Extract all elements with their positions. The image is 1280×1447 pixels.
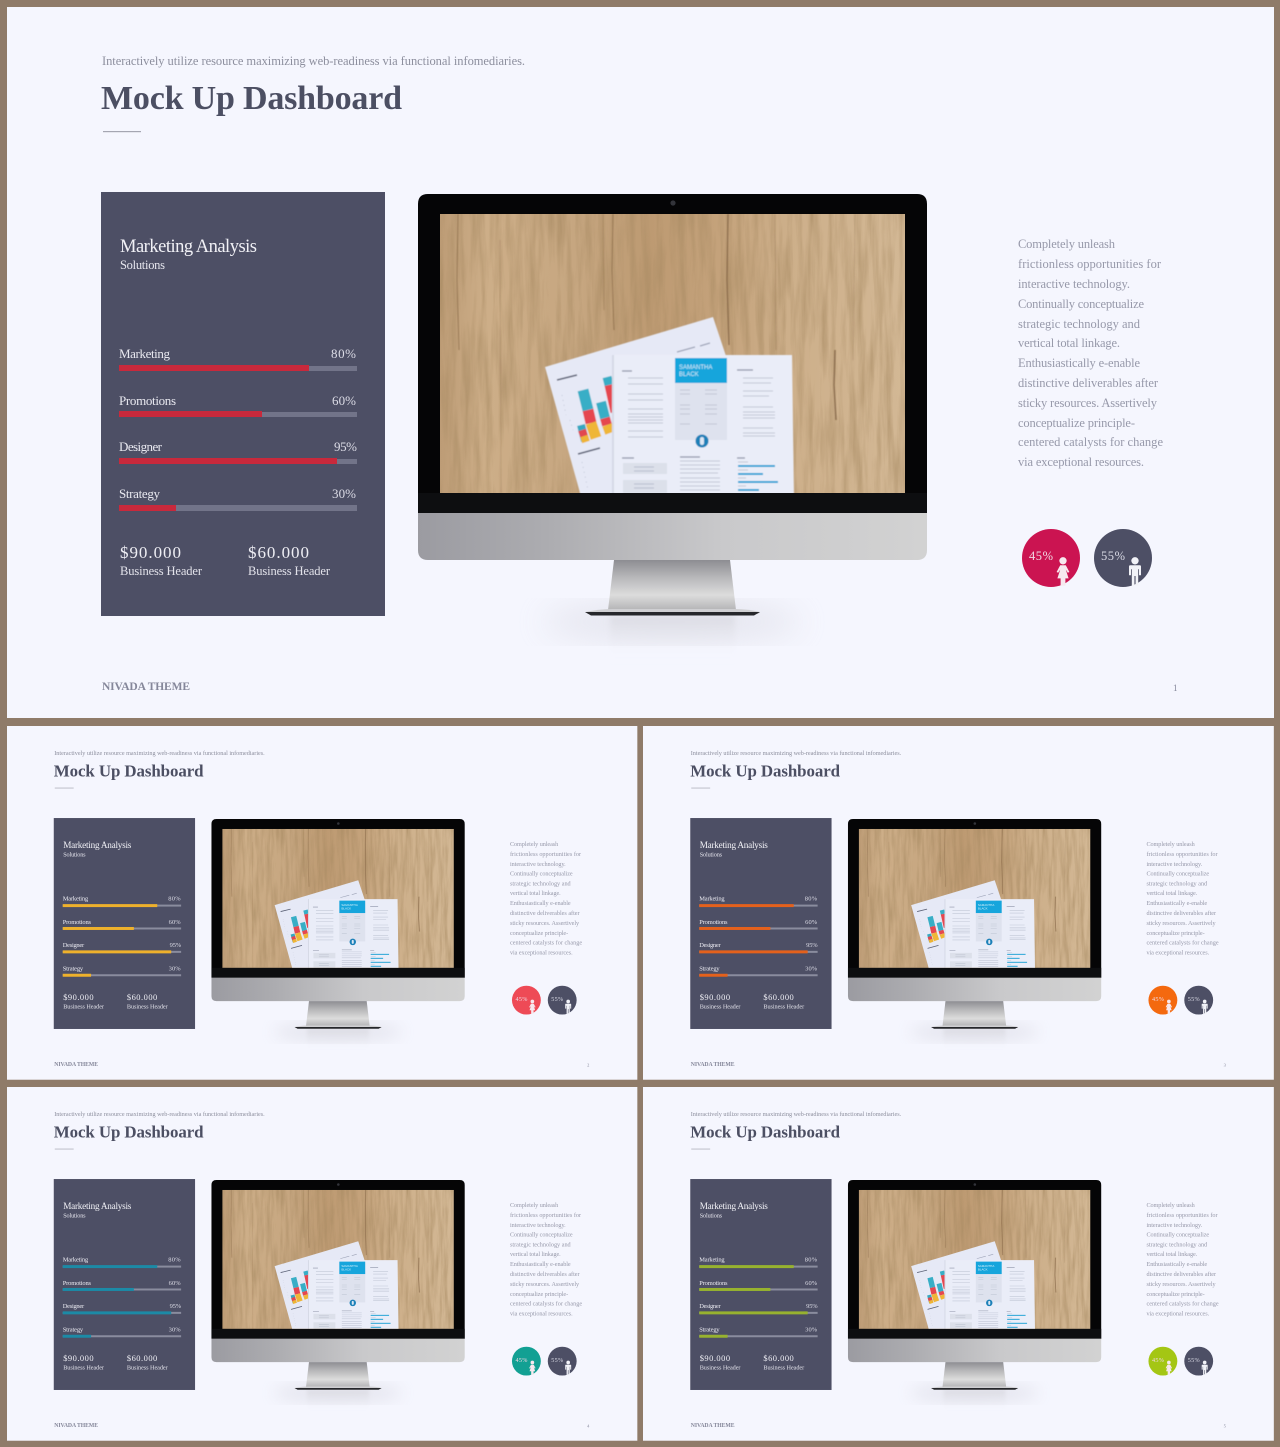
bar: strategy 30% [119, 486, 357, 511]
bar: promotions 60%: 60% [169, 919, 181, 926]
body text: sticky resources. Assertively [1146, 1281, 1217, 1288]
body text: vertical total linkage. [1146, 1251, 1198, 1258]
male share circle: 55% [551, 996, 563, 1003]
male share circle [1094, 529, 1152, 587]
subtitle: Interactively utilize resource maximizing web-readiness via functional infomediaries. [54, 750, 265, 757]
slide 2 (yellow) [7, 726, 637, 1080]
body text: Enthusiastically e-enable [1018, 356, 1140, 370]
page number: 3 [1224, 1062, 1227, 1067]
stat: 60.000: Business Header [127, 1004, 169, 1011]
stat: 60.000: Business Header [763, 1365, 805, 1372]
female share circle: 45% [1152, 1357, 1164, 1364]
stat: 90.000 [63, 1353, 105, 1372]
footer brand: NIVADA THEME [54, 1423, 98, 1429]
male share circle: 55% [1188, 1357, 1200, 1364]
subtitle: Interactively utilize resource maximizing web-readiness via functional infomediaries. [54, 1111, 265, 1118]
panel: marketing analysis [690, 1179, 832, 1390]
stat: 60.000: $60.000 [127, 992, 157, 1002]
bar: promotions 60%: Promotions [699, 1280, 728, 1287]
body text: via exceptional resources. [510, 1310, 573, 1317]
bar: marketing 80%: Marketing [699, 1257, 725, 1264]
bar: strategy 30%: 30% [805, 1326, 818, 1333]
stat: 90.000: Business Header [700, 1365, 741, 1372]
bar: promotions 60%: Promotions [699, 919, 728, 926]
body text [510, 1202, 582, 1317]
bar: designer 95%: Designer [63, 1303, 85, 1310]
stat: 60.000 [248, 543, 331, 578]
bar: marketing 80% [63, 1257, 181, 1268]
stat: 60.000: $60.000 [127, 1353, 157, 1363]
body text: distinctive deliverables after [1146, 1271, 1217, 1278]
stat: 90.000: Business Header [63, 1365, 105, 1372]
stat: 90.000: $90.000 [120, 543, 181, 562]
monitor mockup [211, 1180, 465, 1413]
body text: sticky resources. Assertively [1146, 920, 1217, 927]
bar: promotions 60%: Promotions [63, 1280, 92, 1287]
panel: marketing analysis: Solutions [700, 851, 723, 858]
body text: frictionless opportunities for [1146, 1212, 1219, 1219]
bar: marketing 80% [699, 896, 818, 907]
panel: marketing analysis: Marketing Analysis [700, 840, 768, 850]
bar: designer 95%: 95% [334, 439, 357, 454]
bar: marketing 80%: 80% [805, 1257, 818, 1264]
stat: 60.000: $60.000 [763, 992, 794, 1002]
body text: interactive technology. [1146, 861, 1203, 868]
body text: interactive technology. [1146, 1222, 1203, 1229]
panel: marketing analysis: Solutions [63, 851, 86, 858]
body text: conceptualize principle- [1146, 1291, 1205, 1298]
bar: promotions 60% [63, 919, 181, 930]
slide 5 (green) [643, 1087, 1274, 1441]
bar: marketing 80%: Marketing [63, 896, 89, 903]
body text: Enthusiastically e-enable [1146, 900, 1207, 907]
bar: promotions 60%: 60% [805, 1280, 818, 1287]
bar: strategy 30%: 30% [332, 486, 356, 501]
stat: 90.000 [700, 1353, 741, 1372]
bar: promotions 60%: 60% [805, 919, 818, 926]
title: Mock Up Dashboard [690, 762, 841, 781]
female share circle [1022, 529, 1080, 587]
stat: 60.000: Business Header [763, 1004, 805, 1011]
male share circle [1184, 986, 1213, 1015]
footer brand: NIVADA THEME [691, 1062, 735, 1068]
body text: interactive technology. [1018, 277, 1130, 291]
bar: promotions 60%: 60% [332, 393, 356, 408]
bar: strategy 30% [63, 1326, 181, 1338]
footer brand: NIVADA THEME [102, 681, 190, 693]
bar: designer 95%: Designer [699, 1303, 721, 1310]
stat: 90.000: $90.000 [700, 1353, 730, 1363]
bar: strategy 30%: Strategy [63, 965, 84, 972]
body text: distinctive deliverables after [510, 910, 581, 917]
bar: promotions 60% [119, 393, 357, 417]
stat: 60.000 [127, 1353, 169, 1372]
male share circle: 55% [551, 1357, 563, 1364]
bar: promotions 60%: 60% [169, 1280, 181, 1287]
body text: frictionless opportunities for [1018, 257, 1162, 271]
bar: designer 95%: 95% [170, 1303, 182, 1310]
body text: distinctive deliverables after [1146, 910, 1217, 917]
panel: marketing analysis: Marketing Analysis [63, 840, 132, 850]
stat: 90.000: $90.000 [63, 1353, 94, 1363]
bar: designer 95%: 95% [806, 942, 818, 949]
panel: marketing analysis [690, 818, 832, 1029]
stat: 90.000: Business Header [120, 564, 203, 578]
bar: strategy 30%: Strategy [119, 486, 160, 501]
bar: strategy 30%: Strategy [63, 1326, 84, 1333]
bar: designer 95%: Designer [63, 942, 85, 949]
body text: Enthusiastically e-enable [510, 900, 571, 907]
body text [1146, 1202, 1219, 1317]
main slide (red) [7, 7, 1274, 718]
body text: distinctive deliverables after [1018, 376, 1159, 390]
body text: centered catalysts for change [510, 939, 582, 946]
stat: 60.000: $60.000 [248, 543, 309, 562]
male share circle: 55% [1101, 549, 1125, 563]
bar: marketing 80% [699, 1257, 818, 1268]
stat: 90.000: $90.000 [63, 992, 94, 1002]
subtitle: Interactively utilize resource maximizing web-readiness via functional infomediaries. [102, 54, 525, 68]
body text [1018, 237, 1163, 469]
bar: designer 95% [699, 942, 818, 953]
body text: Continually conceptualize [1146, 1232, 1209, 1239]
body text: distinctive deliverables after [510, 1271, 581, 1278]
bar: marketing 80%: 80% [331, 346, 356, 361]
bar: designer 95% [119, 439, 357, 464]
stat: 60.000: $60.000 [763, 1353, 794, 1363]
panel: marketing analysis [101, 192, 385, 616]
bar: designer 95%: Designer [119, 439, 163, 454]
body text: sticky resources. Assertively [510, 1281, 580, 1288]
body text: frictionless opportunities for [1146, 851, 1219, 858]
body text: sticky resources. Assertively [1018, 396, 1158, 410]
body text: interactive technology. [510, 1222, 566, 1229]
panel: marketing analysis: Solutions [63, 1212, 86, 1219]
body text [510, 841, 582, 956]
bar: strategy 30% [699, 1326, 818, 1338]
stat: 90.000 [120, 543, 203, 578]
bar: promotions 60% [63, 1280, 181, 1291]
bar: strategy 30%: Strategy [699, 1326, 720, 1333]
body text: frictionless opportunities for [510, 851, 582, 858]
panel: marketing analysis [54, 818, 195, 1029]
page number: 4 [587, 1423, 590, 1428]
slide 4 (teal) [7, 1087, 637, 1441]
bar: designer 95%: 95% [806, 1303, 818, 1310]
bar: strategy 30%: 30% [805, 965, 818, 972]
body text: Completely unleash [510, 1202, 559, 1209]
bar: marketing 80%: 80% [168, 896, 181, 903]
bar: marketing 80%: Marketing [63, 1257, 89, 1264]
body text: strategic technology and [1146, 1242, 1208, 1249]
female share circle [512, 1347, 541, 1376]
female share circle: 45% [515, 996, 527, 1003]
body text: Completely unleash [1146, 841, 1196, 848]
title: Mock Up Dashboard [690, 1123, 841, 1142]
stat: 90.000: Business Header [63, 1004, 105, 1011]
body text: conceptualize principle- [1018, 416, 1135, 430]
body text: Enthusiastically e-enable [1146, 1261, 1207, 1268]
body text: Completely unleash [1018, 237, 1116, 251]
female share circle [512, 986, 541, 1015]
bar: designer 95% [63, 1303, 182, 1314]
footer brand: NIVADA THEME [691, 1423, 735, 1429]
page number: 5 [1224, 1423, 1227, 1428]
body text: centered catalysts for change [1146, 1300, 1219, 1307]
body text: conceptualize principle- [510, 930, 568, 937]
body text: via exceptional resources. [510, 949, 573, 956]
page number: 2 [587, 1062, 589, 1067]
bar: marketing 80%: 80% [168, 1257, 181, 1264]
bar: strategy 30%: Strategy [699, 965, 720, 972]
body text: centered catalysts for change [1146, 939, 1219, 946]
stat: 60.000: Business Header [248, 564, 331, 578]
stat: 90.000: Business Header [700, 1004, 741, 1011]
female share circle: 45% [515, 1357, 527, 1364]
panel: marketing analysis: Marketing Analysis [63, 1201, 132, 1211]
body text: Continually conceptualize [510, 871, 573, 878]
bar: promotions 60% [699, 1280, 818, 1291]
female share circle [1148, 1347, 1177, 1376]
monitor mockup [848, 819, 1101, 1052]
body text: Completely unleash [1146, 1202, 1196, 1209]
bar: strategy 30% [63, 965, 181, 977]
bar: strategy 30%: 30% [169, 1326, 181, 1333]
body text: strategic technology and [1018, 317, 1141, 331]
body text: Continually conceptualize [510, 1232, 573, 1239]
body text: centered catalysts for change [1018, 435, 1163, 449]
stat: 90.000: $90.000 [700, 992, 730, 1002]
bar: marketing 80% [63, 896, 181, 907]
subtitle: Interactively utilize resource maximizing web-readiness via functional infomediaries. [691, 750, 902, 757]
body text: Enthusiastically e-enable [510, 1261, 571, 1268]
bar: strategy 30% [699, 965, 818, 977]
body text: centered catalysts for change [510, 1300, 582, 1307]
body text: conceptualize principle- [1146, 930, 1205, 937]
body text: vertical total linkage. [510, 890, 561, 897]
subtitle: Interactively utilize resource maximizing web-readiness via functional infomediaries. [691, 1111, 902, 1118]
panel: marketing analysis: Marketing Analysis [120, 237, 257, 257]
stat: 60.000 [127, 992, 169, 1011]
bar: marketing 80%: Marketing [699, 896, 725, 903]
body text: vertical total linkage. [510, 1251, 561, 1258]
bar: designer 95% [63, 942, 182, 953]
body text: conceptualize principle- [510, 1291, 568, 1298]
bar: designer 95%: Designer [699, 942, 721, 949]
female share circle: 45% [1152, 996, 1164, 1003]
male share circle [1184, 1347, 1213, 1376]
body text: vertical total linkage. [1018, 336, 1120, 350]
page number: 1 [1173, 683, 1178, 693]
slide 3 (orange) [643, 726, 1274, 1080]
panel: marketing analysis [54, 1179, 195, 1390]
body text: Continually conceptualize [1018, 297, 1144, 311]
bar: promotions 60%: Promotions [63, 919, 92, 926]
body text: Continually conceptualize [1146, 871, 1209, 878]
bar: strategy 30%: 30% [169, 965, 181, 972]
bar: marketing 80%: 80% [805, 896, 818, 903]
stat: 60.000: Business Header [127, 1365, 169, 1372]
female share circle: 45% [1029, 549, 1053, 563]
body text: vertical total linkage. [1146, 890, 1198, 897]
female share circle [1148, 986, 1177, 1015]
body text [1146, 841, 1219, 956]
body text: via exceptional resources. [1146, 949, 1210, 956]
male share circle: 55% [1188, 996, 1200, 1003]
bar: designer 95% [699, 1303, 818, 1314]
title: Mock Up Dashboard [101, 80, 402, 117]
panel: marketing analysis: Solutions [120, 258, 165, 272]
body text: strategic technology and [510, 1242, 572, 1249]
bar: promotions 60%: Promotions [119, 393, 176, 408]
stat: 90.000 [700, 992, 741, 1011]
male share circle [548, 1347, 577, 1376]
body text: strategic technology and [1146, 881, 1208, 888]
title: Mock Up Dashboard [54, 1123, 204, 1142]
bar: marketing 80%: Marketing [119, 346, 170, 361]
body text: interactive technology. [510, 861, 566, 868]
body text: via exceptional resources. [1018, 455, 1144, 469]
body text: sticky resources. Assertively [510, 920, 580, 927]
body text: via exceptional resources. [1146, 1310, 1210, 1317]
body text: strategic technology and [510, 881, 572, 888]
panel: marketing analysis: Marketing Analysis [700, 1201, 768, 1211]
body text: Completely unleash [510, 841, 559, 848]
bar: designer 95%: 95% [170, 942, 182, 949]
monitor mockup [848, 1180, 1101, 1413]
monitor mockup [418, 194, 927, 662]
stat: 60.000 [763, 992, 805, 1011]
male share circle [548, 986, 577, 1015]
footer brand: NIVADA THEME [54, 1062, 98, 1068]
stat: 60.000 [763, 1353, 805, 1372]
stat: 90.000 [63, 992, 105, 1011]
body text: frictionless opportunities for [510, 1212, 582, 1219]
bar: marketing 80% [119, 346, 357, 371]
bar: promotions 60% [699, 919, 818, 930]
panel: marketing analysis: Solutions [700, 1212, 723, 1219]
title: Mock Up Dashboard [54, 762, 204, 781]
monitor mockup [211, 819, 465, 1052]
